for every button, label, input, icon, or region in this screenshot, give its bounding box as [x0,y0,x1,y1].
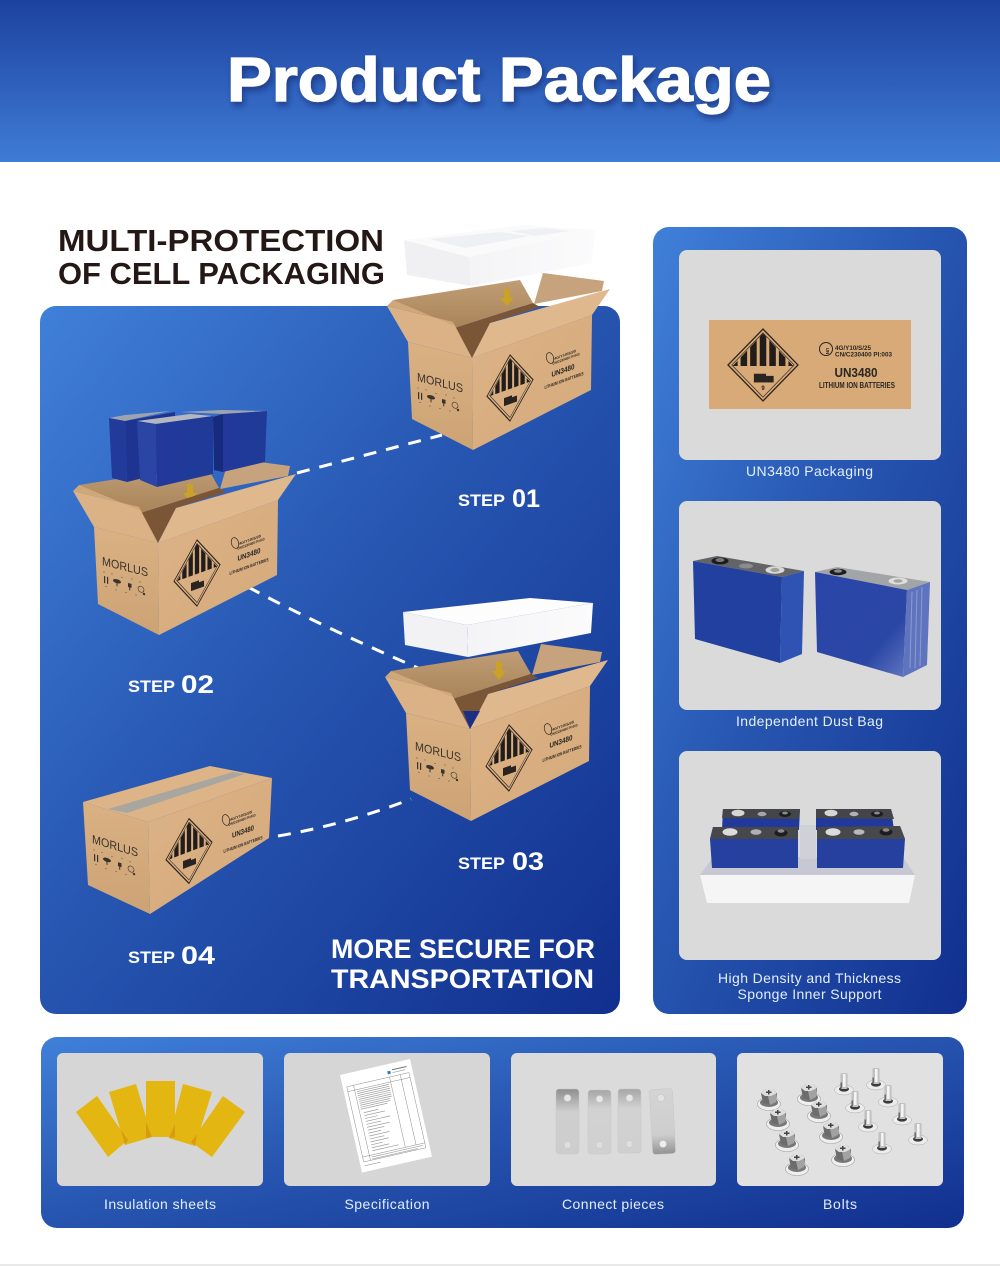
label: step 02: STEP [128,677,175,696]
arrow: step 2 to step 3 dashed connector [248,587,418,668]
header banner [0,0,1000,162]
caption: Independent Dust Bag [736,713,883,729]
text block: more secure for transportation: TRANSPORTATION [331,964,594,994]
box markings: LITHIUM ION BATTERIES [230,557,268,577]
label: step 03: STEP [458,854,505,873]
foam tray [404,225,595,286]
box markings: 4G/Y10/S/25 [230,810,252,822]
label: UN3480 carton marking: LITHIUM ION BATTERIES [819,381,896,390]
caption [718,970,901,1002]
card: sponge inner support [679,751,941,960]
icon: yellow sheets [76,1081,245,1157]
card: connect pieces [511,1053,716,1186]
box markings: UN3480 [552,362,574,379]
text block: more secure for transportation: MORE SECURE FOR [331,934,595,964]
heading: multi-protection of cell packaging [58,223,385,291]
arrow: down into box [183,484,197,502]
label: UN3480 carton marking: 9 [761,386,765,392]
arrow: down into box [500,289,514,306]
box markings: MORLUS [92,832,138,860]
caption: UN3480 Packaging [746,463,873,479]
arrow: step 3 to step 4 dashed connector [278,799,411,836]
box markings: CN/C230400 PI:003 [238,537,264,551]
label: step 04 [128,942,215,970]
sponge block [700,825,915,903]
card: UN3480 packaging [679,250,941,460]
box markings [92,810,262,892]
foam lid [403,598,593,657]
title: Product Package [227,46,771,115]
label: step 02 [128,671,214,699]
box: step 04 sealed [83,766,272,914]
label: step 03: 03 [512,848,544,876]
label: step 02: 02 [181,671,214,699]
icon: metal connector plates [556,1088,676,1155]
battery cell bare [693,556,804,663]
box markings: LITHIUM ION BATTERIES [224,835,262,855]
box markings: CN/C230400 PI:003 [553,352,579,366]
caption: Insulation sheets [104,1196,216,1212]
box: step 02 with battery cells [73,410,296,635]
caption: Bolts [823,1196,857,1212]
box markings: LITHIUM ION BATTERIES [542,744,582,764]
arrow: step 2 to step 1 dashed connector [297,435,442,473]
cells visible inside box [463,711,480,729]
label: step 04: 04 [181,942,215,970]
caption: High Density and Thickness [718,970,901,986]
battery cells [109,410,267,487]
caption: Specification [344,1196,430,1212]
panel: packaging features [653,227,967,1014]
label: UN3480 carton marking: CN/C230400 PI:003 [835,352,892,358]
box markings: UN3480 [238,546,260,563]
box markings: MORLUS [415,739,461,764]
panel: accessories [41,1037,964,1228]
label: UN3480 carton marking [709,320,911,409]
icon: nuts and studs [758,1068,928,1176]
caption: Sponge Inner Support [738,986,882,1002]
panel: multi-protection steps [40,306,620,1014]
box: step 01 with foam lid [387,225,610,450]
box markings: CN/C230400 PI:003 [551,723,577,737]
label: step 04: STEP [128,948,175,967]
card: bolts [737,1053,943,1186]
box markings [417,347,584,429]
card: independent dust bag [679,501,941,710]
box markings [102,532,268,614]
box markings: UN3480 [232,823,254,840]
box markings [415,717,582,799]
label: step 03 [458,848,544,876]
icon: specification document [340,1059,432,1173]
label: UN3480 carton marking: UN3480 [834,366,878,380]
heading: multi-protection of cell packaging: OF CELL PACKAGING [58,256,385,291]
box markings: CN/C230400 PI:003 [229,813,255,827]
box markings: 4G/Y10/S/25 [554,349,576,361]
text block: more secure for transportation [331,934,595,994]
battery cells from above [710,809,905,868]
battery cell in dust bag [815,567,930,677]
label: UN3480 carton marking: 4G/Y10/S/25 [835,345,871,352]
box markings: LITHIUM ION BATTERIES [544,371,584,391]
box markings: UN3480 [550,733,572,750]
box: step 03 with foam lid [385,598,608,821]
caption: Connect pieces [562,1196,664,1212]
box markings: MORLUS [102,554,148,579]
box markings: 4G/Y10/S/25 [239,534,261,546]
arrow: down into box [492,662,506,680]
label: step 01 [458,485,540,513]
box markings: 4G/Y10/S/25 [552,720,574,732]
label: step 01: STEP [458,491,505,510]
card: insulation sheets [57,1053,263,1186]
box markings: MORLUS [417,370,463,395]
heading: multi-protection of cell packaging: MULTI-PROTECTION [58,223,384,258]
label: step 01: 01 [512,485,540,513]
card: specification [284,1053,490,1186]
label: UN3480 carton marking: UN [825,348,830,354]
